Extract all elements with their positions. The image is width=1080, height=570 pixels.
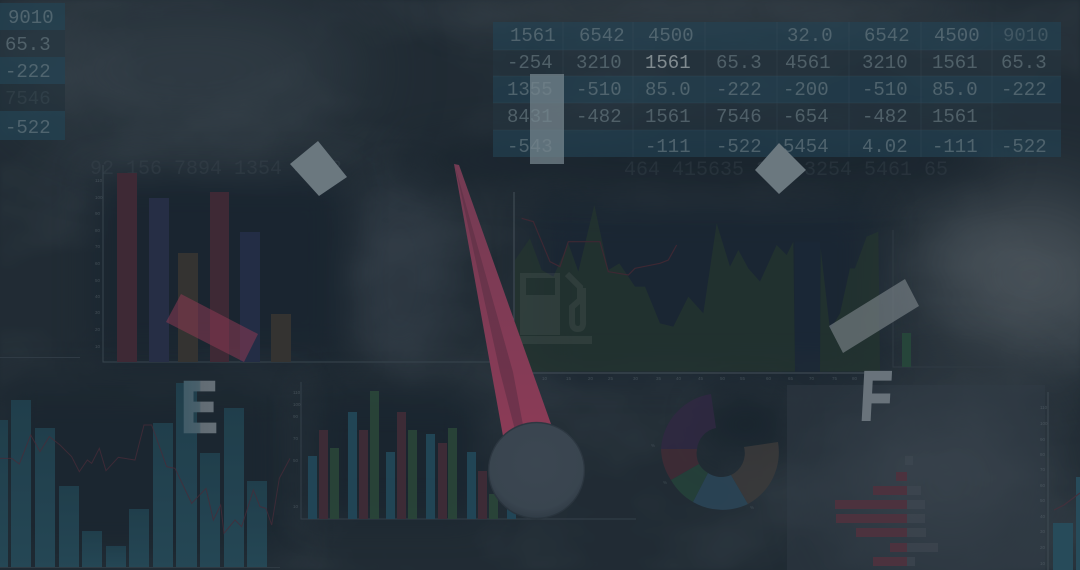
main data table: 7546 (716, 106, 762, 128)
main data table: 1561 (932, 106, 978, 128)
icon: fuel pump (514, 273, 592, 344)
area chart: centre right: 45 (698, 376, 704, 381)
main data table: -111 (932, 136, 978, 158)
letter E: gauge empty mark: E (181, 367, 218, 448)
main data table: 6542 (864, 25, 910, 47)
bar chart: lower left teal with line: 110 (293, 390, 301, 395)
bar chart fragment: far right: 50 (1040, 498, 1046, 503)
main data table: -510 (862, 79, 908, 101)
left data table fragment (0, 3, 65, 140)
main data table: -654 (783, 106, 829, 128)
left data table fragment: 7546 (5, 88, 51, 110)
ghost number strip, right: 464 415635 322 3254 5461 65 (624, 159, 948, 182)
area chart: centre right: 55 (740, 376, 746, 381)
letter F: gauge full mark: F (858, 358, 894, 436)
area chart: centre right: 65 (788, 376, 794, 381)
bar chart: lower left teal with line: 50 (293, 458, 299, 463)
bar chart fragment: far right: 70 (1040, 467, 1046, 472)
bar chart: upper left: 60 (95, 261, 101, 266)
bar chart: upper left: 70 (95, 244, 101, 249)
main data table: -200 (783, 79, 829, 101)
main data table: -254 (507, 52, 553, 74)
area chart: centre right: 80 (852, 376, 858, 381)
area chart: centre right: 50 (720, 376, 726, 381)
main data table: -522 (716, 136, 762, 158)
left data table fragment: 9010 (8, 7, 54, 29)
area chart: centre right: 30 (633, 376, 639, 381)
main data table: -111 (645, 136, 691, 158)
main data table: -222 (1001, 79, 1047, 101)
area chart: centre right (514, 192, 1080, 381)
main data table: 3210 (862, 52, 908, 74)
main data table: 5454 (783, 136, 829, 158)
main data table: 32.0 (787, 25, 833, 47)
main data table: 3210 (576, 52, 622, 74)
bar chart fragment: far right: 100 (1040, 421, 1048, 426)
bar chart fragment: far right: 20 (1040, 545, 1046, 550)
area chart: centre right: 60 (766, 376, 772, 381)
bar chart fragment: far right: 40 (1040, 514, 1046, 519)
main data table: 1561 (645, 52, 691, 74)
main data table: -543 (507, 136, 553, 158)
gauge tick: left, low side red (166, 294, 258, 362)
area chart: centre right: 15 (566, 376, 572, 381)
gauge tick: right, full side (829, 279, 919, 353)
panel: horizontal bar chart (787, 385, 1045, 570)
gauge hub (488, 422, 585, 519)
bar chart: upper left: 10 (95, 344, 101, 349)
area chart: centre right: 25 (608, 376, 614, 381)
bar chart: lower left teal with line: 70 (293, 436, 299, 441)
gauge needle (454, 164, 551, 436)
main data table: 1561 (645, 106, 691, 128)
bar chart: lower left teal with line (0, 383, 301, 568)
bar chart: upper left: 100 (95, 195, 103, 200)
main data table: 85.0 (932, 79, 978, 101)
main data table (493, 22, 1061, 158)
area chart: centre right: 75 (832, 376, 838, 381)
main data table: -222 (716, 79, 762, 101)
bar chart fragment: far right: 90 (1040, 437, 1046, 442)
main data table: 8431 (507, 106, 553, 128)
area chart: centre right: 35 (656, 376, 662, 381)
bar chart: upper left: 40 (95, 294, 101, 299)
bar chart fragment: far right: 10 (1040, 561, 1046, 566)
donut chart: % (750, 505, 754, 510)
bar chart fragment: far right: 80 (1040, 452, 1046, 457)
main data table: 1561 (932, 52, 978, 74)
left data table fragment: 65.3 (5, 34, 51, 56)
donut chart: % (663, 480, 667, 485)
bar chart: upper left: 90 (95, 211, 101, 216)
bar chart: lower left teal with line: 10 (293, 504, 299, 509)
main data table: -522 (1001, 136, 1047, 158)
main data table: -482 (862, 106, 908, 128)
bar chart: centre grouped (301, 382, 636, 519)
bar chart: upper left: 110 (95, 178, 103, 183)
main data table: 65.3 (716, 52, 762, 74)
main data table: 4500 (934, 25, 980, 47)
area chart: centre right: 40 (676, 376, 682, 381)
bar chart fragment: far right (1040, 392, 1080, 570)
bar chart: upper left: 50 (95, 278, 101, 283)
area chart: centre right: 20 (588, 376, 594, 381)
area chart: centre right: 70 (809, 376, 815, 381)
gauge tick: upper right (755, 143, 806, 194)
bar chart fragment: far right: 110 (1040, 405, 1048, 410)
bar chart: upper left (0, 165, 490, 362)
gauge tick: upper left (290, 141, 347, 196)
main data table: 1561 (510, 25, 556, 47)
main data table: -510 (576, 79, 622, 101)
bar chart: upper left: 30 (95, 310, 101, 315)
bar chart fragment: far right: 30 (1040, 529, 1046, 534)
main data table: 65.3 (1001, 52, 1047, 74)
bar chart: upper left: 80 (95, 228, 101, 233)
left data table fragment: -222 (5, 61, 51, 83)
bar chart: upper left: 20 (95, 327, 101, 332)
main data table: 1355 (507, 79, 553, 101)
main data table: -482 (576, 106, 622, 128)
main data table: 4.02 (862, 136, 908, 158)
donut chart: % (651, 443, 655, 448)
bar chart fragment: far right: 60 (1040, 483, 1046, 488)
main data table: 4500 (648, 25, 694, 47)
bar chart: lower left teal with line: 100 (293, 402, 301, 407)
area chart: centre right: 10 (542, 376, 548, 381)
bar chart: lower left teal with line: 90 (293, 414, 299, 419)
main data table: 6542 (579, 25, 625, 47)
gauge tick: top centre vertical (530, 74, 564, 164)
main data table: 85.0 (645, 79, 691, 101)
main data table: 4561 (785, 52, 831, 74)
left data table fragment: -522 (5, 117, 51, 139)
donut chart (651, 394, 779, 510)
main data table: 9010 (1003, 25, 1049, 47)
ghost number strip, left: 92 156 7894 1354 4158 (90, 158, 342, 181)
